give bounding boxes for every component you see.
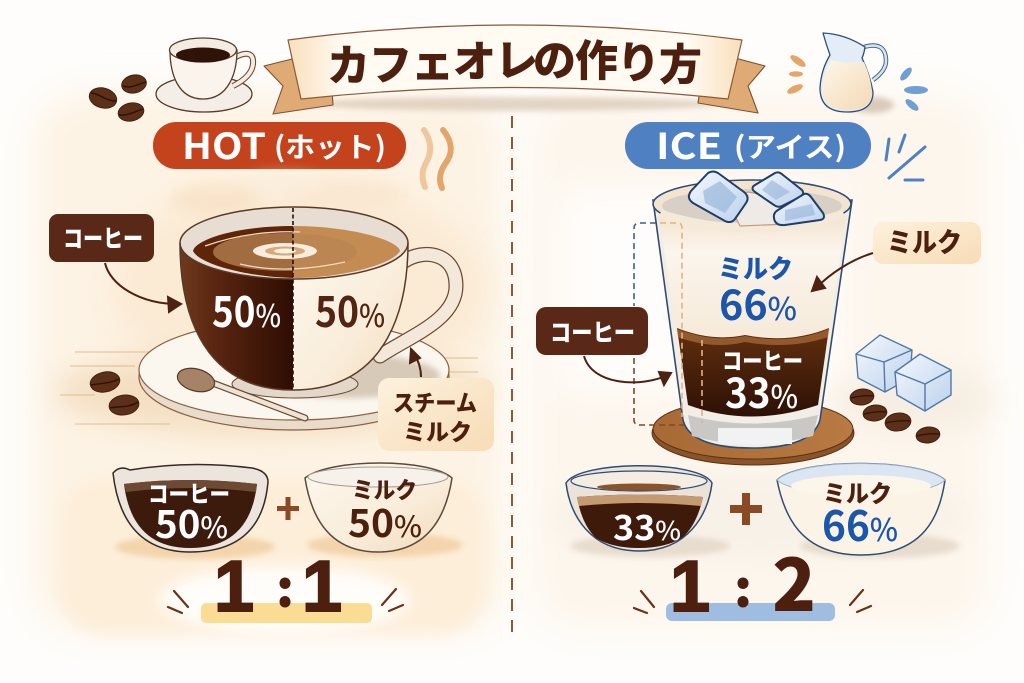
burst marks ice (634, 590, 871, 613)
label: steamed milk (378, 378, 494, 451)
glass base (688, 415, 818, 444)
title text: カフェオレの作り方 (327, 27, 702, 94)
milk 66 percent: ミルク (718, 249, 793, 286)
plus hot (277, 497, 299, 520)
50% milk label: 50% (315, 279, 385, 340)
latte art (205, 232, 357, 271)
HOT heading pill: HOT (182, 118, 266, 170)
coffee 33 percent: 33% (725, 360, 798, 420)
hot: ratio 1:1: : (276, 547, 294, 622)
hot: coffee bowl: コーヒー (148, 475, 230, 509)
ice: ratio 1:2: 1 (670, 547, 710, 627)
coffee surface, dark half (193, 226, 293, 278)
cup body, milk half (293, 240, 408, 390)
label: steamed milk: ミルク (403, 413, 472, 447)
hot: ratio 1:1 (201, 547, 372, 627)
coffee surface, light half (293, 226, 400, 278)
hot: coffee bowl: 50% (155, 494, 228, 549)
icon: milk pitcher (820, 33, 894, 113)
icon: blue splash marks (898, 66, 928, 113)
icon: steam lines (422, 130, 451, 188)
hot: milk bowl: ミルク (352, 471, 417, 505)
burst marks hot (168, 589, 403, 613)
label: coffee hot (49, 214, 154, 262)
spoon (175, 364, 305, 418)
label: coffee hot: コーヒー (63, 219, 143, 254)
ice: coffee bowl (566, 466, 730, 557)
glass rim (653, 180, 851, 233)
arrow: coffee hot (105, 263, 181, 312)
coaster (652, 399, 854, 465)
ice: ratio 1:2: : (734, 547, 752, 622)
coffee 33 percent: コーヒー (722, 342, 803, 376)
milk 66 percent: 66% (719, 272, 797, 332)
label: milk ice: ミルク (887, 221, 962, 260)
cup handle (380, 254, 456, 356)
hot: coffee bowl (113, 464, 275, 559)
illustration: iced cafe au lait glass (652, 172, 854, 465)
hot: milk bowl: 50% (348, 493, 422, 548)
rim and inner wall (180, 207, 408, 279)
icon: beans near saucer (88, 369, 140, 417)
ice: coffee bowl: 33% (613, 501, 681, 550)
hot: ratio 1:1: 1 (214, 547, 254, 627)
dashed bracket around glass (634, 223, 702, 425)
ICE heading pill (625, 118, 871, 170)
label: steamed milk: スチーム (393, 384, 477, 418)
hot: milk bowl (305, 463, 463, 557)
ice cubes in glass (689, 172, 824, 226)
icon: loose ice cubes (856, 335, 951, 411)
saucer (139, 320, 449, 430)
50% coffee label: 50% (212, 279, 281, 340)
background panel: ice side wash (530, 92, 995, 632)
steam cloud above hot cup (170, 175, 405, 216)
ice: milk bowl (777, 464, 960, 558)
HOT heading pill (153, 118, 406, 170)
HOT heading pill: (ホット) (274, 126, 386, 166)
icon: coffee beans top left (87, 73, 148, 124)
icon: beans near glass (849, 387, 941, 445)
background panel: hot side wash (34, 92, 504, 634)
arrow: milk ice (812, 253, 873, 291)
ice: ratio 1:2 (666, 527, 835, 632)
cup foot (232, 370, 358, 398)
icon: coffee cup on saucer (156, 38, 253, 112)
icon: orange splash marks (786, 53, 807, 96)
ICE heading pill: (アイス) (734, 126, 846, 166)
icon: cold sparkle lines (886, 135, 925, 180)
dashed split line (292, 208, 294, 390)
ice: milk bowl: 66% (822, 493, 898, 554)
label: milk ice (873, 221, 981, 264)
label: coffee ice: コーヒー (550, 313, 635, 348)
cup body, coffee half (180, 240, 293, 390)
illustration: hot cafe au lait cup (139, 207, 456, 430)
arrow: coffee ice (584, 356, 671, 385)
ice: milk bowl: ミルク (823, 474, 892, 509)
hot: ratio 1:1: 1 (302, 547, 342, 627)
dashed center divider (511, 116, 513, 636)
glass body (653, 200, 852, 448)
ICE heading pill: ICE (656, 118, 722, 170)
title banner (264, 25, 765, 114)
coffee layer (677, 328, 829, 416)
plus ice (730, 493, 762, 525)
label: coffee ice (536, 307, 648, 355)
milk layer (658, 215, 847, 339)
ice: ratio 1:2: 2 (772, 527, 816, 632)
arrow: steamed milk (410, 349, 421, 377)
